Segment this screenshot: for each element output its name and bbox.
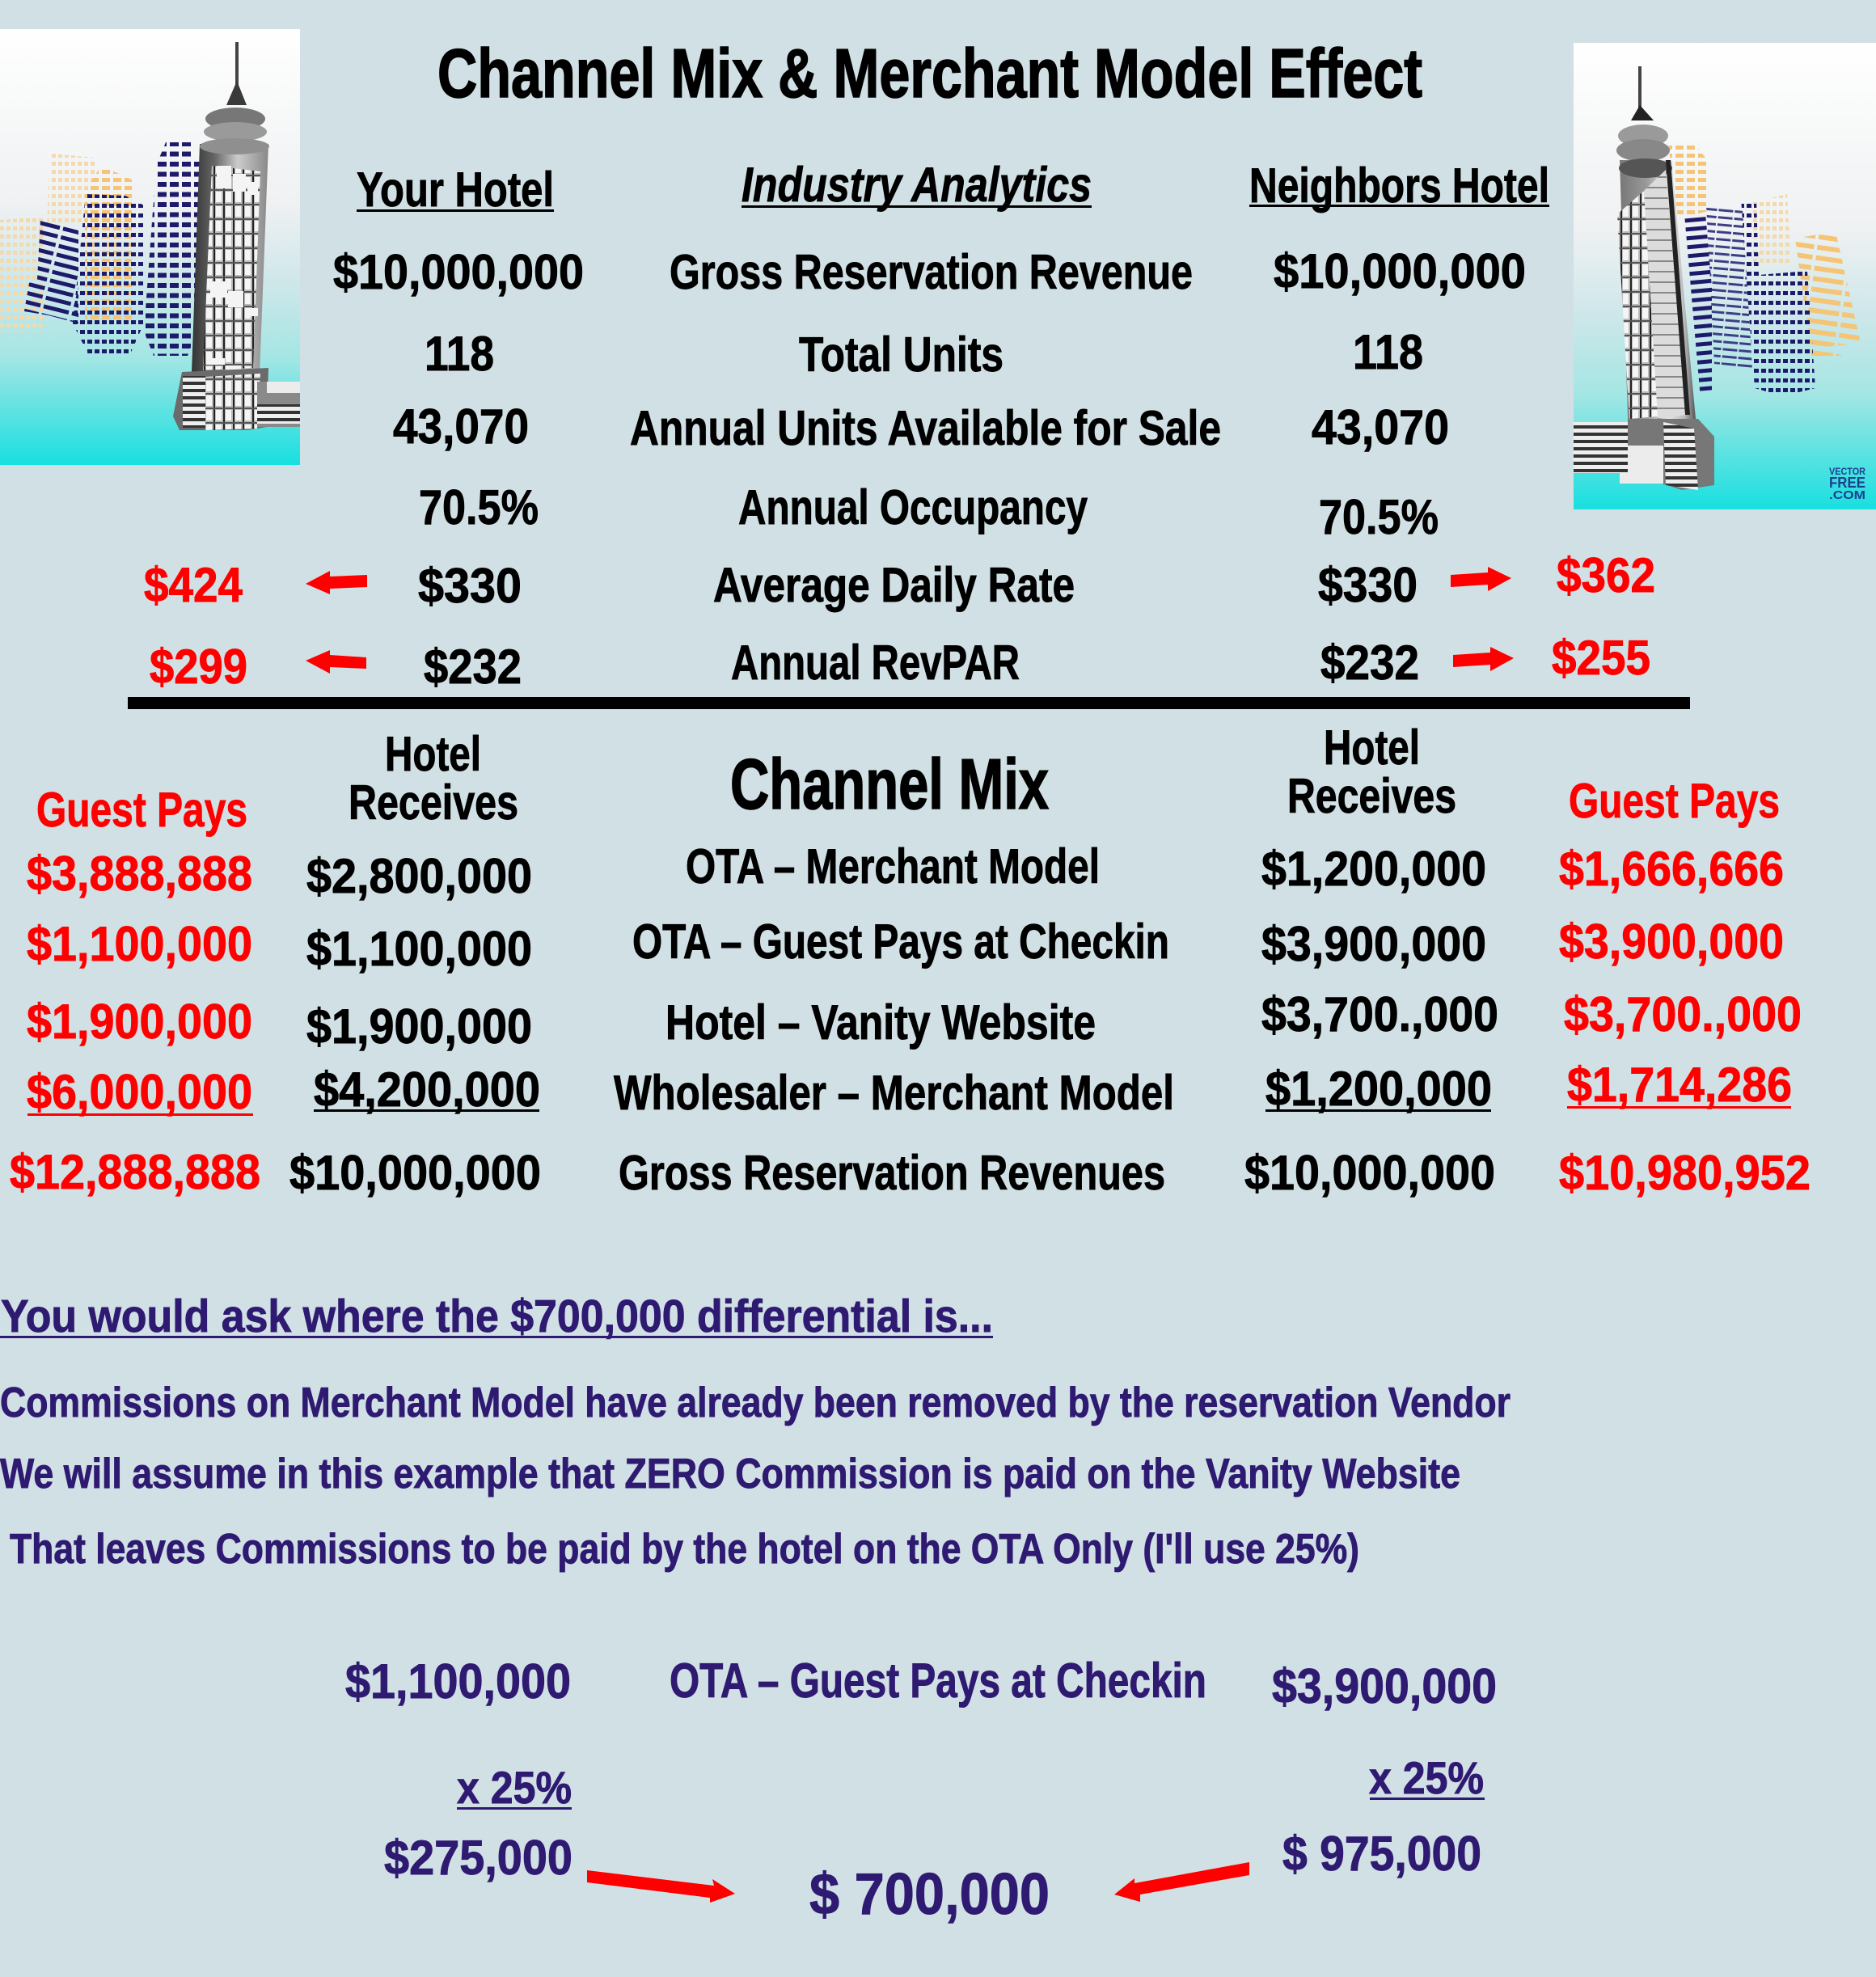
heading: hotel receives (349, 727, 518, 830)
guest pays total: $10,980,952 (1559, 1146, 1811, 1200)
gross revenue value: $10,000,000 (333, 245, 584, 299)
neighbors rate: x 25% (1369, 1752, 1484, 1803)
watermark logo: VECTOR (1829, 466, 1865, 477)
arrow: RevPAR to guest RevPAR (306, 650, 366, 674)
title: Channel Mix & Merchant Model Effect (437, 36, 1422, 112)
ADR value: $330 (418, 559, 522, 613)
receives total: $10,000,000 (289, 1146, 541, 1200)
RevPAR value: $232 (1320, 636, 1419, 690)
label: total units: Total Units (799, 327, 1003, 382)
heading: hotel receives: Hotel (1324, 720, 1420, 775)
receives OTA checkin: $3,900,000 (1261, 917, 1486, 971)
receives total: $10,000,000 (1244, 1146, 1495, 1200)
panel: neighbors hotel metrics (1249, 158, 1549, 690)
watermark logo: .COM (1829, 488, 1865, 502)
watermark logo (1829, 466, 1865, 502)
panel: neighbors channel mix hotel receives (1244, 720, 1498, 1200)
panel: commission calculation (345, 1654, 1497, 1927)
illustration: left hotel skyline (0, 29, 300, 465)
guest pays vanity website: $1,900,000 (27, 995, 252, 1049)
guest RevPAR value: $255 (1552, 631, 1650, 685)
arrow: ADR to guest ADR (1451, 567, 1511, 591)
occupancy value: 70.5% (419, 480, 539, 534)
explanation line 3: That leaves Commissions to be paid by the hotel on the OTA Only (I'll use 25%) (10, 1526, 1359, 1573)
RevPAR value: $232 (424, 640, 522, 694)
label: gross reservation revenues: Gross Reservation Revenues (619, 1146, 1165, 1200)
your hotel OTA amount: $1,100,000 (345, 1654, 571, 1709)
heading: hotel receives: Hotel (385, 727, 481, 781)
label: hotel vanity website: Hotel – Vanity Website (665, 995, 1096, 1050)
receives wholesaler: $4,200,000 (314, 1062, 540, 1117)
guest RevPAR value: $299 (150, 640, 247, 694)
heading: industry analytics: Industry Analytics (742, 158, 1092, 212)
receives vanity website: $1,900,000 (306, 999, 532, 1054)
heading: guest pays: Guest Pays (1569, 774, 1780, 828)
receives OTA merchant: $2,800,000 (306, 849, 532, 903)
guest pays wholesaler: $6,000,000 (27, 1065, 252, 1119)
occupancy value: 70.5% (1319, 490, 1439, 544)
total units value: 118 (425, 327, 494, 381)
label: average daily rate: Average Daily Rate (713, 558, 1075, 612)
annual units value: 43,070 (393, 399, 529, 454)
guest ADR value: $362 (1557, 548, 1655, 602)
label: OTA guest pays at checkin: OTA – Guest Pays at Checkin (632, 915, 1169, 969)
neighbors OTA amount: $3,900,000 (1272, 1659, 1497, 1713)
label: wholesaler merchant model: Wholesaler – Merchant Model (614, 1066, 1174, 1120)
heading: channel mix: Channel Mix (730, 744, 1049, 824)
guest pays wholesaler: $1,714,286 (1567, 1058, 1792, 1112)
neighbors commission: $ 975,000 (1282, 1827, 1481, 1881)
label: gross reservation revenue: Gross Reservation Revenue (670, 245, 1193, 299)
heading: your hotel: Your Hotel (357, 163, 554, 217)
watermark logo: FREE (1829, 475, 1865, 491)
guest pays OTA checkin: $3,900,000 (1559, 915, 1784, 969)
label: annual RevPAR: Annual RevPAR (731, 636, 1020, 690)
gross revenue value: $10,000,000 (1274, 244, 1526, 298)
panel: your hotel guest-paid rates (144, 558, 367, 694)
explanation heading: You would ask where the $700,000 differential is... (1, 1291, 993, 1342)
heading: hotel receives: Receives (349, 775, 518, 830)
explanation line 2: We will assume in this example that ZERO Commission is paid on the Vanity Website (0, 1451, 1460, 1498)
receives vanity website: $3,700.,000 (1261, 987, 1498, 1041)
label: annual occupancy: Annual Occupancy (738, 480, 1088, 534)
panel: neighbors channel mix guest pays (1559, 774, 1811, 1200)
explanation line 1: Commissions on Merchant Model have already been removed by the reservation Vendor (0, 1379, 1511, 1426)
your hotel commission: $275,000 (384, 1831, 573, 1885)
heading: guest pays: Guest Pays (36, 783, 247, 837)
arrow: RevPAR to guest RevPAR (1453, 647, 1514, 671)
guest pays OTA checkin: $1,100,000 (27, 917, 252, 971)
panel: your hotel channel mix hotel receives (289, 727, 541, 1200)
receives OTA merchant: $1,200,000 (1261, 842, 1486, 896)
annual units value: 43,070 (1312, 400, 1449, 454)
guest pays OTA merchant: $3,888,888 (27, 847, 252, 901)
arrow: ADR to guest ADR (306, 571, 367, 594)
panel: your hotel metrics (333, 163, 584, 694)
guest pays total: $12,888,888 (10, 1145, 260, 1199)
your hotel rate: x 25% (457, 1762, 572, 1813)
receives wholesaler: $1,200,000 (1265, 1062, 1492, 1116)
panel: explanation text (0, 1291, 1511, 1573)
guest ADR value: $424 (144, 558, 243, 612)
guest pays vanity website: $3,700.,000 (1564, 987, 1802, 1041)
panel: channel mix labels (614, 744, 1174, 1200)
panel: neighbors hotel guest-paid rates (1451, 548, 1655, 685)
calculation label: OTA – Guest Pays at Checkin (670, 1654, 1206, 1708)
illustration: right hotel skyline (1574, 43, 1876, 509)
ADR value: $330 (1318, 558, 1418, 612)
heading: neighbors hotel: Neighbors Hotel (1249, 158, 1549, 213)
section divider (128, 697, 1690, 709)
label: OTA merchant model: OTA – Merchant Model (686, 839, 1100, 893)
total units value: 118 (1353, 325, 1423, 379)
differential total: $ 700,000 (809, 1862, 1050, 1927)
receives OTA checkin: $1,100,000 (306, 922, 532, 976)
arrow: to differential from left (587, 1870, 735, 1903)
panel: your hotel channel mix guest pays (10, 783, 260, 1199)
heading: hotel receives (1287, 720, 1456, 823)
arrow: to differential from right (1114, 1862, 1249, 1902)
label: annual units available: Annual Units Available for Sale (630, 401, 1221, 455)
panel: industry analytics labels (630, 158, 1221, 690)
guest pays OTA merchant: $1,666,666 (1559, 842, 1784, 896)
heading: hotel receives: Receives (1287, 769, 1456, 823)
